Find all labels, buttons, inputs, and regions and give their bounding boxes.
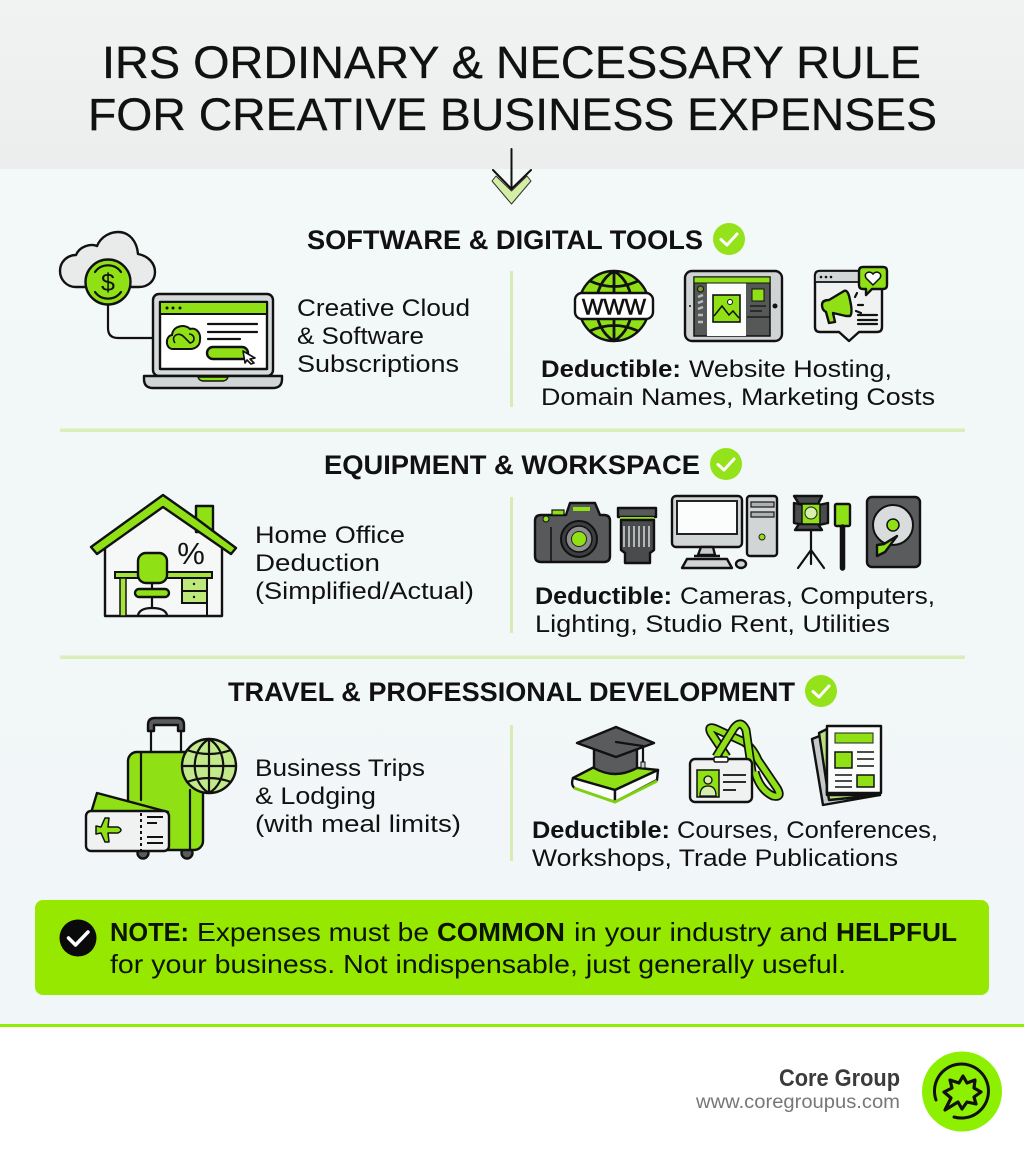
- text: business trips and lodging: [255, 755, 461, 838]
- icon: tablet design app: [685, 271, 782, 341]
- text: creative cloud and software subscriptions: Creative Cloud: [297, 295, 470, 322]
- icon: marketing megaphone: [815, 267, 887, 341]
- icon: camera: [535, 503, 610, 562]
- text: deductible software items: [541, 356, 935, 411]
- text: deductible development items: Workshops, Trade Publications: [532, 845, 898, 872]
- text: home office deduction: Deduction: [255, 550, 380, 577]
- icon: graduation cap on book: [572, 727, 658, 802]
- icon: core group logo: [922, 1052, 1002, 1132]
- panel: equipment and workspace: [91, 448, 935, 638]
- icon: cloud and laptop: $: [101, 269, 115, 297]
- footer: [0, 1024, 1024, 1132]
- icon: check badge: [710, 448, 742, 480]
- text: home office deduction: (Simplified/Actual): [255, 578, 474, 605]
- text: home office deduction: Home Office: [255, 522, 405, 549]
- text: note body: HELPFUL: [836, 917, 957, 947]
- panel: travel and professional development: [86, 675, 938, 872]
- heading: software and digital tools: SOFTWARE & DIGITAL TOOLS: [307, 225, 703, 255]
- arrow: down: [492, 149, 531, 204]
- text: note body: NOTE:: [110, 917, 189, 947]
- heading: travel and professional development: TRAVEL & PROFESSIONAL DEVELOPMENT: [228, 677, 795, 707]
- text: creative cloud and software subscriptions: & Software: [297, 323, 424, 350]
- icon: check badge: [805, 675, 837, 707]
- icon: hard drive: [867, 497, 920, 567]
- text: deductible equipment items: [535, 583, 935, 638]
- icon: cloud and laptop: [60, 232, 282, 388]
- icon: note check: [60, 920, 96, 956]
- text: brand name: Core Group: [779, 1065, 900, 1092]
- text: deductible development items: Deductible:: [532, 817, 670, 844]
- text: deductible software items: Domain Names, Marketing Costs: [541, 384, 935, 411]
- callout: note: [35, 900, 989, 995]
- text: deductible development items: Courses, Conferences,: [677, 817, 938, 844]
- text: website: www.coregroupus.com: [695, 1092, 900, 1113]
- text: home office deduction: [255, 522, 474, 605]
- text: deductible software items: Deductible:: [541, 356, 681, 383]
- icon: trade publications: [812, 726, 881, 805]
- text: creative cloud and software subscriptions: Subscriptions: [297, 351, 459, 378]
- header band with title: IRS ORDINARY & NECESSARY RULE: [102, 37, 921, 88]
- icon: home office house: %: [177, 536, 205, 571]
- icon: suitcase with globe and ticket: [86, 718, 236, 858]
- text: note body: Expenses must be: [197, 917, 429, 947]
- text: note body: [110, 917, 957, 979]
- icon: studio light: [794, 496, 850, 568]
- panel: software and digital tools: [60, 223, 935, 411]
- header band with title: [0, 0, 1024, 169]
- icon: www globe: WWW: [582, 294, 646, 320]
- text: note body: COMMON: [437, 917, 565, 947]
- text: deductible equipment items: Deductible:: [535, 583, 672, 610]
- text: deductible development items: [532, 817, 938, 872]
- icon: www globe: [575, 271, 653, 341]
- text: deductible equipment items: Cameras, Computers,: [680, 583, 935, 610]
- icon: conference badge with lanyard: [690, 724, 779, 802]
- header band with title: FOR CREATIVE BUSINESS EXPENSES: [88, 89, 937, 140]
- text: business trips and lodging: & Lodging: [255, 783, 376, 810]
- text: business trips and lodging: (with meal limits): [255, 811, 461, 838]
- icon: home office house: [91, 495, 236, 616]
- text: deductible equipment items: Lighting, Studio Rent, Utilities: [535, 611, 890, 638]
- text: note body: for your business. Not indispensable, just generally useful.: [110, 949, 846, 979]
- icon: camera lens: [618, 508, 656, 563]
- icon: desktop computer: [672, 496, 777, 568]
- icon: check badge: [713, 223, 745, 255]
- text: note body: in your industry and: [574, 917, 828, 947]
- text: business trips and lodging: Business Trips: [255, 755, 425, 782]
- heading: equipment and workspace: EQUIPMENT & WORKSPACE: [324, 450, 700, 480]
- text: deductible software items: Website Hosting,: [689, 356, 892, 383]
- text: creative cloud and software subscriptions: [297, 295, 470, 378]
